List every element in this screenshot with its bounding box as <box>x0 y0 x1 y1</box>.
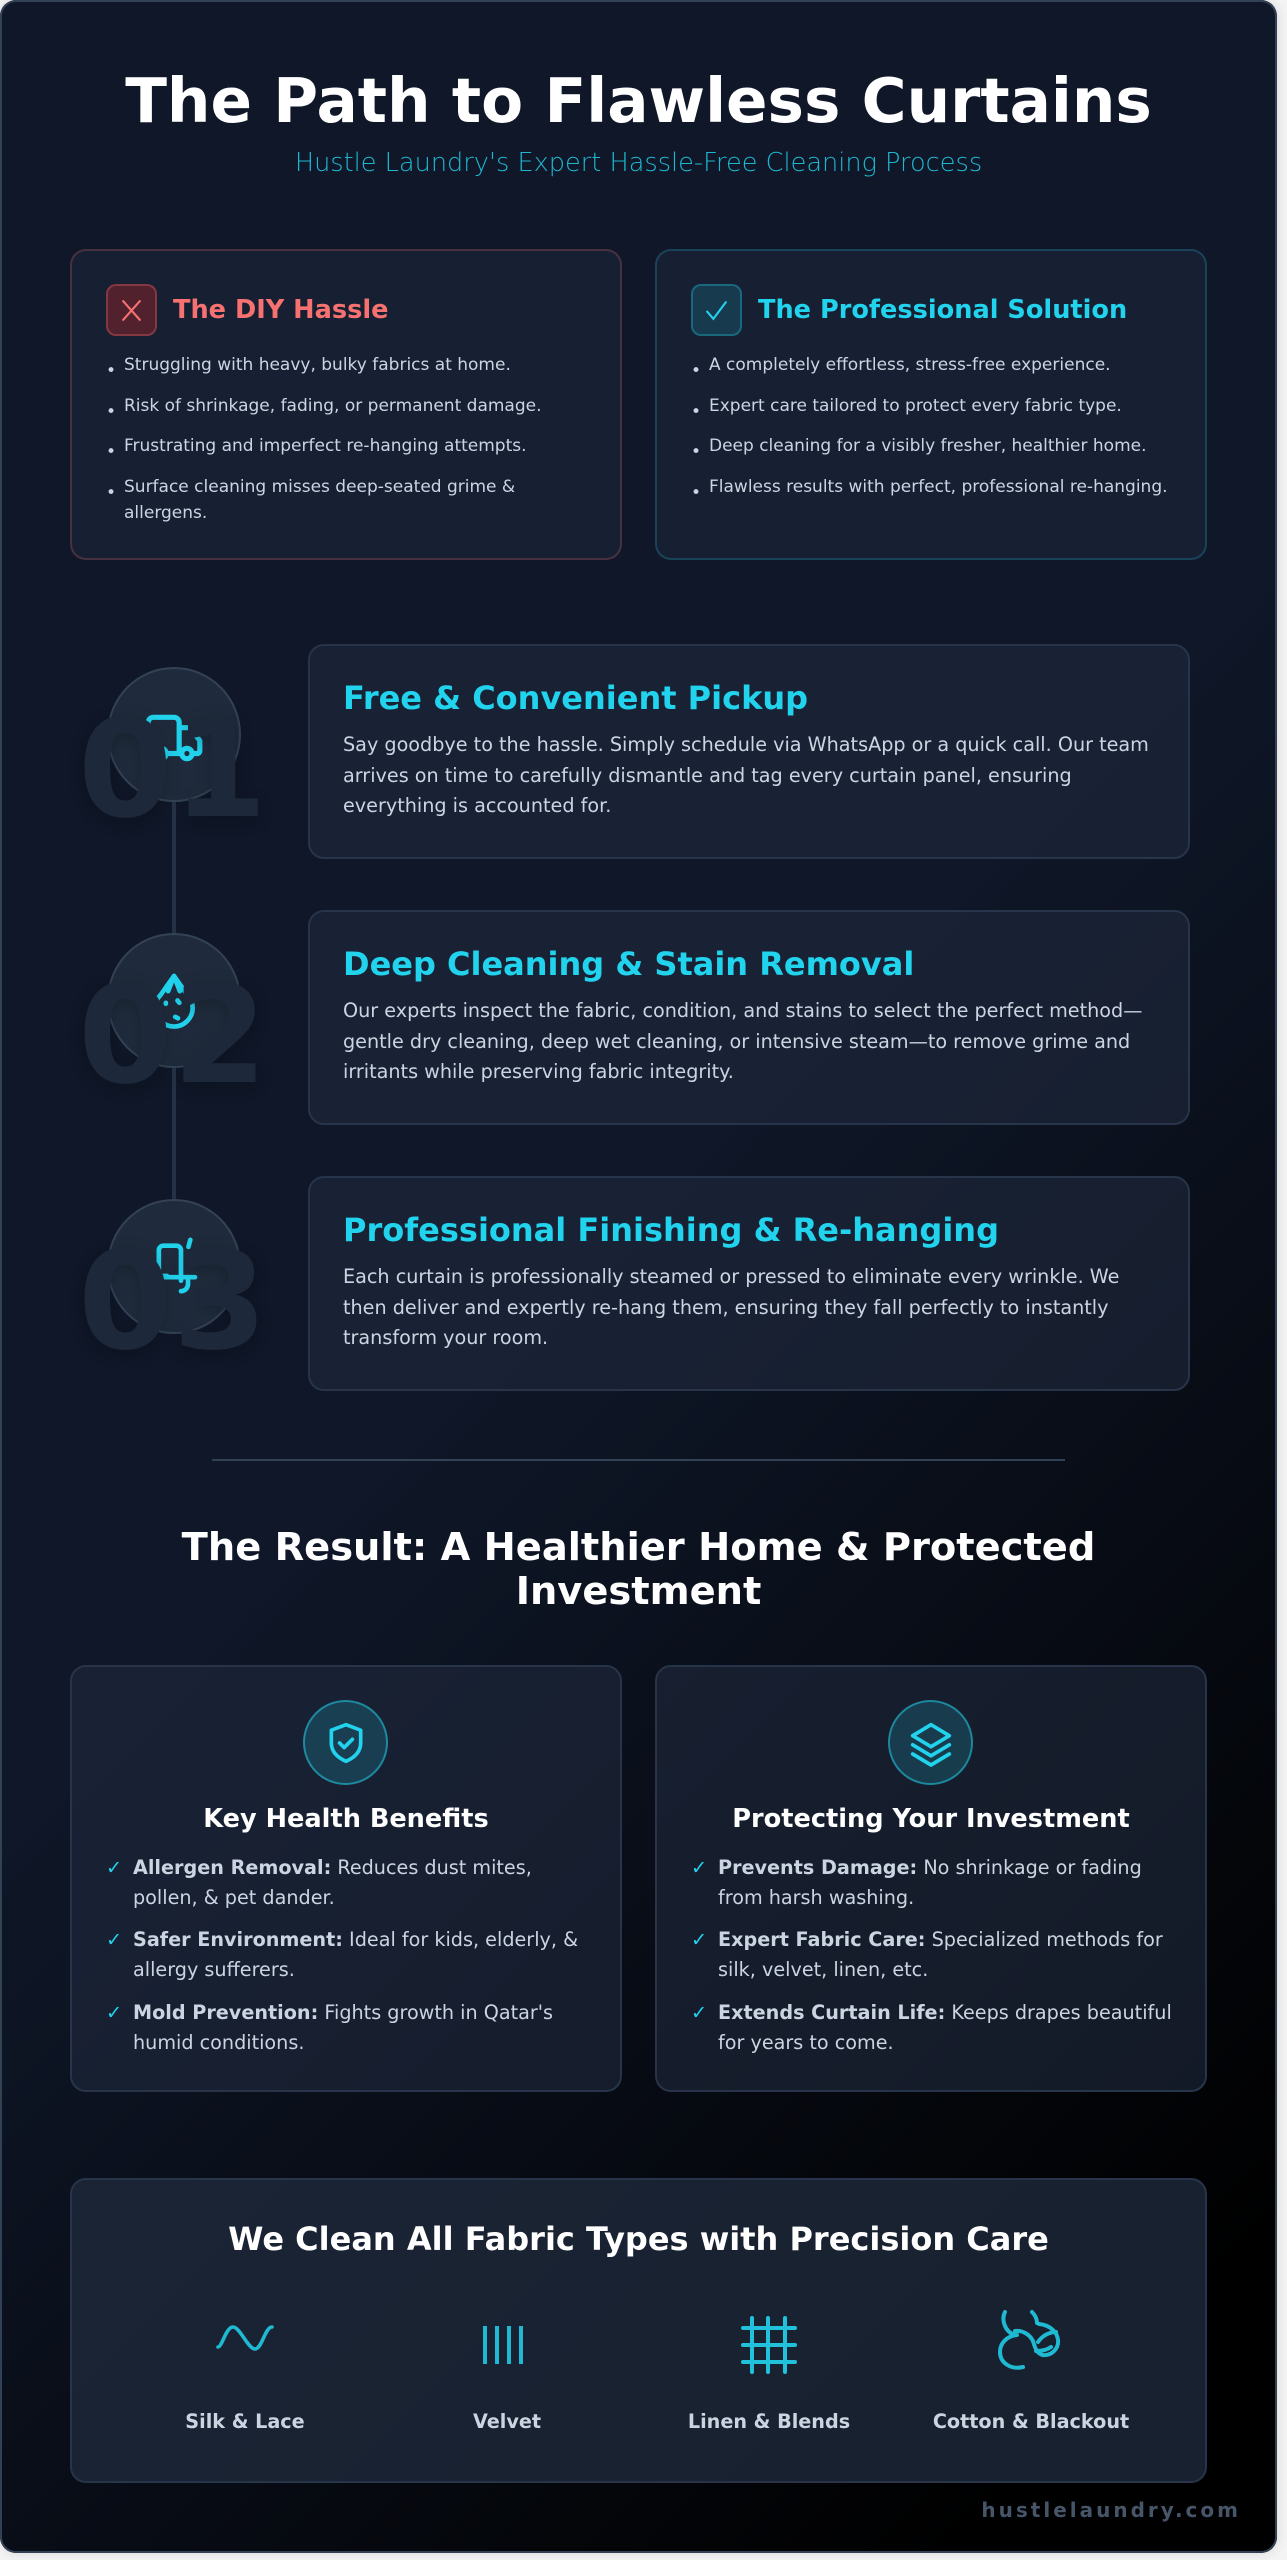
list: health benefits: allergy sufferers. <box>133 1958 295 1981</box>
result heading: Investment <box>516 1569 761 1614</box>
list: health benefits: humid conditions. <box>133 2031 304 2054</box>
list: health benefits: ✓ <box>106 1856 122 1879</box>
heading: investment: Protecting Your Investment <box>732 1804 1130 1834</box>
label: linen: Linen & Blends <box>688 2410 850 2433</box>
result heading: The Result: A Healthier Home & Protected <box>182 1525 1095 1570</box>
list: DIY problems: allergens. <box>124 503 207 523</box>
list: investment: from harsh washing. <box>718 1886 914 1909</box>
step 3 circle <box>107 1199 241 1334</box>
list: professional benefits: A completely effortless, stress-free experience. <box>709 355 1111 375</box>
step 2 text <box>343 999 1142 1083</box>
panel: protecting your investment <box>655 1665 1207 2092</box>
list: investment: Expert Fabric Care: Specialized methods for <box>718 1928 1163 1951</box>
list: DIY problems: • <box>106 402 116 422</box>
panel: fabric types <box>70 2178 1207 2483</box>
list: health benefits: Mold Prevention: Fights growth in Qatar's <box>133 2001 553 2024</box>
list: health benefits: Safer Environment: Ideal for kids, elderly, & <box>133 1928 578 1951</box>
list: professional benefits <box>691 355 1168 503</box>
subtitle: Hustle Laundry's Expert Hassle-Free Cleaning Process <box>295 148 982 178</box>
list: health benefits: ✓ <box>106 2001 122 2024</box>
result heading <box>182 1525 1095 1614</box>
list: investment <box>691 1856 1172 2054</box>
step 1 text: everything is accounted for. <box>343 794 611 817</box>
list: DIY problems: • <box>106 442 116 462</box>
heading: health benefits: Key Health Benefits <box>203 1804 489 1834</box>
list: investment: Extends Curtain Life: Keeps drapes beautiful <box>718 2001 1172 2024</box>
step 3 text: then deliver and expertly re-hang them, ensuring they fall perfectly to instantly <box>343 1296 1108 1319</box>
step 2 text: Our experts inspect the fabric, condition, and stains to select the perfect method— <box>343 999 1142 1022</box>
list: health benefits: Allergen Removal: Reduces dust mites, <box>133 1856 532 1879</box>
label: cotton: Cotton & Blackout <box>933 2410 1129 2433</box>
label: silk: Silk & Lace <box>185 2410 305 2433</box>
icon: steamer <box>156 1238 198 1294</box>
icon: cotton <box>998 2310 1060 2370</box>
list: DIY problems: Risk of shrinkage, fading, or permanent damage. <box>124 396 542 416</box>
icon: droplet <box>156 974 195 1029</box>
icon: truck <box>146 714 202 762</box>
step 2 <box>78 910 1190 1125</box>
list: investment: Prevents Damage: No shrinkage or fading <box>718 1856 1142 1879</box>
heading: DIY hassle: The DIY Hassle <box>173 295 388 325</box>
icon: shield <box>303 1700 388 1785</box>
step 2 number: 02 <box>78 957 267 1115</box>
list: health benefits: pollen, & pet dander. <box>133 1886 335 1909</box>
step 3 text: Each curtain is professionally steamed or pressed to eliminate every wrinkle. We <box>343 1265 1119 1288</box>
step 3 card <box>308 1176 1190 1391</box>
step 1 card <box>308 644 1190 859</box>
list: DIY problems: Struggling with heavy, bulky fabrics at home. <box>124 355 511 375</box>
list: DIY problems: • <box>106 361 116 381</box>
step 3 text: transform your room. <box>343 1326 548 1349</box>
icon: velvet lines <box>483 2326 523 2364</box>
list: health benefits: ✓ <box>106 1928 122 1951</box>
list: professional benefits: • <box>691 442 701 462</box>
heading: fabric types: We Clean All Fabric Types with Precision Care <box>228 2220 1049 2258</box>
list: professional benefits: Expert care tailored to protect every fabric type. <box>709 396 1122 416</box>
title: The Path to Flawless Curtains <box>125 66 1152 137</box>
panel: the DIY hassle <box>70 249 622 560</box>
panel: the professional solution <box>655 249 1207 560</box>
list: professional benefits: Flawless results with perfect, professional re-hanging. <box>709 477 1168 497</box>
step 1 number: 01 <box>78 691 267 849</box>
icon: cross <box>106 284 157 336</box>
list: DIY problems: • <box>106 483 116 503</box>
step 3 <box>78 1176 1190 1391</box>
list: investment: for years to come. <box>718 2031 894 2054</box>
icon: linen grid <box>741 2316 797 2374</box>
list: DIY problems <box>106 355 542 523</box>
heading: professional solution: The Professional Solution <box>758 295 1127 325</box>
step 1 text <box>343 733 1149 817</box>
step 3 title: Professional Finishing & Re-hanging <box>343 1211 999 1249</box>
label: velvet: Velvet <box>473 2410 541 2433</box>
step 2 circle <box>107 933 241 1068</box>
list: investment: ✓ <box>691 2001 707 2024</box>
step 1 <box>78 644 1190 859</box>
list: investment: silk, velvet, linen, etc. <box>718 1958 928 1981</box>
step 1 text: arrives on time to carefully dismantle and tag every curtain panel, ensuring <box>343 764 1072 787</box>
list: DIY problems: Frustrating and imperfect re-hanging attempts. <box>124 436 527 456</box>
icon: silk wave <box>216 2325 274 2351</box>
icon: layers <box>888 1700 973 1785</box>
list: professional benefits: • <box>691 361 701 381</box>
step 2 text: irritants while preserving fabric integrity. <box>343 1060 734 1083</box>
list: DIY problems: Surface cleaning misses deep-seated grime & <box>124 477 515 497</box>
list: health benefits <box>106 1856 578 2054</box>
step 2 title: Deep Cleaning & Stain Removal <box>343 945 914 983</box>
step 2 text: gentle dry cleaning, deep wet cleaning, or intensive steam—to remove grime and <box>343 1030 1130 1053</box>
step 1 title: Free & Convenient Pickup <box>343 679 808 717</box>
list: investment: ✓ <box>691 1928 707 1951</box>
timeline connector <box>172 800 176 1205</box>
list: professional benefits: Deep cleaning for a visibly fresher, healthier home. <box>709 436 1146 456</box>
step 3 number: 03 <box>78 1223 267 1381</box>
step 1 circle <box>107 667 241 802</box>
list: professional benefits: • <box>691 402 701 422</box>
list: investment: ✓ <box>691 1856 707 1879</box>
icon: check <box>691 284 742 336</box>
step 3 text <box>343 1265 1119 1349</box>
panel: key health benefits <box>70 1665 622 2092</box>
footer url: hustlelaundry.com <box>981 2498 1241 2522</box>
list: professional benefits: • <box>691 483 701 503</box>
step 1 text: Say goodbye to the hassle. Simply schedule via WhatsApp or a quick call. Our team <box>343 733 1149 756</box>
step 2 card <box>308 910 1190 1125</box>
